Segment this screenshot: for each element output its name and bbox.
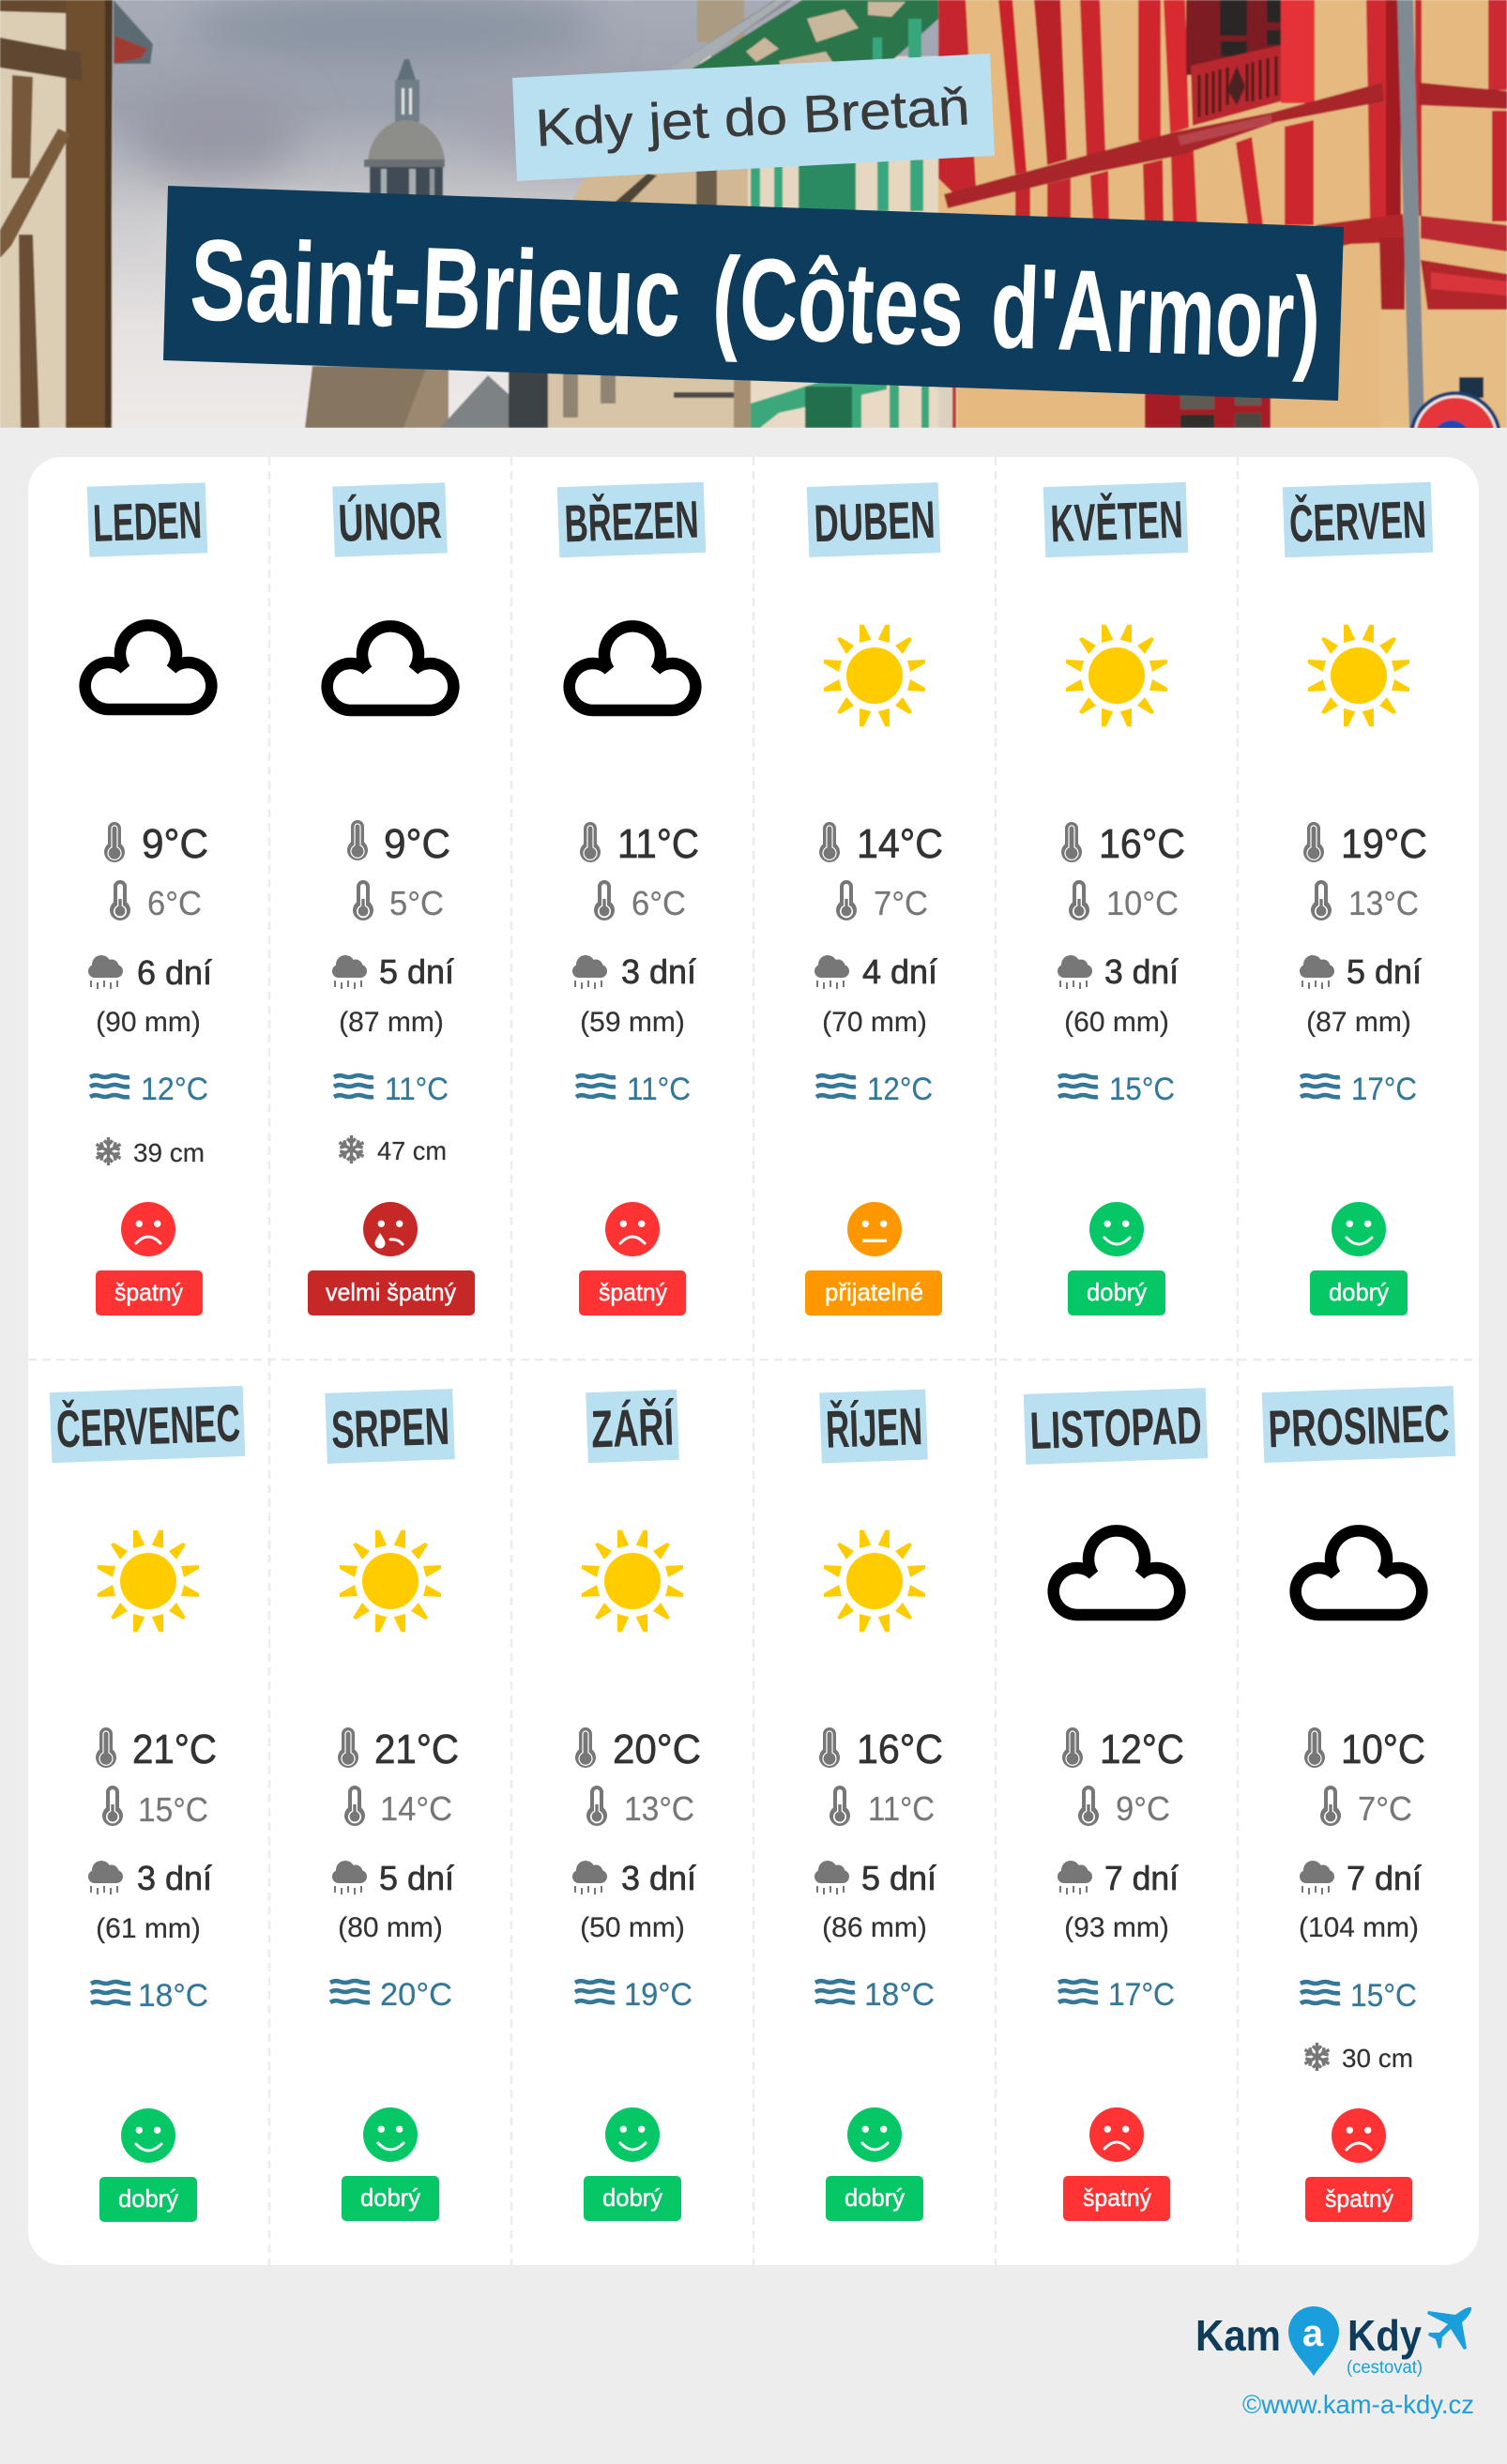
icon: min temperature (1311, 880, 1332, 920)
sea temperature: 15°C (1350, 1978, 1417, 2014)
icon: cloud (85, 625, 211, 709)
max temperature: 19°C (1341, 821, 1427, 867)
title tag: Kdy jet do Bretaň: Kdy jet do Bretaň (534, 76, 971, 158)
rainfall: (87 mm) (1306, 1007, 1411, 1038)
rating badge: dobrý (360, 2183, 420, 2212)
rating badge (1305, 2177, 1412, 2222)
max temperature: 20°C (613, 1726, 701, 1772)
icon: cloud (570, 626, 695, 710)
min temperature: 10°C (1106, 884, 1179, 922)
icon: rain (1058, 1861, 1092, 1894)
month panel: Březen (557, 482, 706, 1316)
month panel: Říjen (814, 1390, 943, 2221)
rating badge (96, 1270, 203, 1316)
rating badge: dobrý (1087, 1278, 1147, 1306)
icon: max temperature (347, 820, 368, 860)
month label: ŘÍJEN (825, 1396, 923, 1459)
icon: sea (330, 1981, 370, 2002)
icon: min temperature (830, 1786, 850, 1826)
min temperature: 9°C (1116, 1789, 1170, 1828)
rainy days: 3 dní (1104, 952, 1179, 991)
sea temperature: 11°C (627, 1072, 691, 1107)
icon: sea (90, 1075, 129, 1097)
rainfall: (50 mm) (580, 1912, 685, 1943)
rainfall: (86 mm) (822, 1912, 927, 1943)
logo: Kam a Kdy (cestovat) (1195, 2306, 1471, 2378)
icon: max temperature (575, 1727, 596, 1768)
rating badge: dobrý (1329, 1278, 1389, 1306)
sea temperature: 11°C (385, 1072, 449, 1107)
icon: rain (88, 955, 123, 989)
rating badge (342, 2176, 439, 2221)
icon: rain (332, 955, 367, 989)
sea temperature: 19°C (624, 1977, 693, 2013)
month label (807, 482, 940, 557)
rating badge: dobrý (602, 2183, 662, 2212)
title banner: Saint-Brieuc (Côtes d'Armor): (Côtes (710, 234, 967, 372)
icon: bad face (121, 1202, 175, 1256)
rainfall: (104 mm) (1299, 1912, 1419, 1943)
rating badge (584, 2176, 681, 2221)
icon: max temperature (1062, 1727, 1083, 1768)
month label (87, 482, 207, 557)
rainfall: (87 mm) (339, 1007, 444, 1038)
rainy days: 4 dní (862, 952, 937, 991)
icon: min temperature (836, 880, 857, 920)
sea temperature: 12°C (867, 1072, 933, 1107)
max temperature: 9°C (142, 821, 208, 867)
rainfall: (59 mm) (580, 1007, 685, 1038)
icon: min temperature (1069, 880, 1089, 920)
snowfall: 47 cm (377, 1136, 447, 1165)
icon: good face (121, 2108, 175, 2163)
max temperature: 9°C (384, 821, 450, 867)
header photo: half-timbered houses in Brittany (0, 0, 1507, 428)
logo: Kam a Kdy (cestovat): Kam (1195, 2311, 1281, 2360)
month label: LISTOPAD (1029, 1395, 1203, 1460)
max temperature: 16°C (1099, 821, 1185, 867)
max temperature: 10°C (1341, 1726, 1425, 1772)
max temperature: 12°C (1100, 1726, 1184, 1772)
rainy days: 6 dní (137, 953, 212, 992)
icon: good face (847, 2107, 902, 2162)
title banner: Saint-Brieuc (Côtes d'Armor): d'Armor) (989, 244, 1322, 384)
snowfall: 30 cm (1342, 2044, 1413, 2073)
month label: ČERVENEC (55, 1393, 241, 1458)
logo: Kam a Kdy (cestovat): a (1302, 2313, 1324, 2354)
icon: rain (572, 955, 607, 989)
icon: sea (334, 1075, 373, 1097)
month panel: Únor (308, 482, 475, 1316)
icon: plane (1427, 2307, 1471, 2350)
icon: sun (1066, 625, 1167, 726)
rainfall: (61 mm) (96, 1913, 201, 1944)
icon: min temperature (586, 1786, 607, 1826)
month label (50, 1386, 245, 1463)
rainy days: 3 dní (621, 952, 696, 991)
icon: rain (1300, 955, 1334, 989)
icon: max temperature (96, 1727, 116, 1768)
icon: cloud (1054, 1530, 1180, 1615)
rainfall: (93 mm) (1064, 1912, 1169, 1943)
rating badge (308, 1270, 475, 1316)
rating badge: velmi špatný (326, 1278, 456, 1306)
month label (1024, 1388, 1208, 1465)
min temperature: 6°C (632, 884, 686, 922)
month label: BŘEZEN (563, 490, 700, 553)
icon: sea (91, 1982, 130, 2003)
rainy days: 5 dní (379, 952, 454, 991)
panel: climate calendar card (28, 457, 1479, 2265)
month panel: Prosinec (1262, 1386, 1455, 2222)
icon: sea (816, 1075, 856, 1097)
icon: max temperature (819, 1727, 840, 1768)
month label: SRPEN (330, 1396, 450, 1459)
icon: cloud (327, 626, 453, 710)
icon: rain (1300, 1861, 1334, 1894)
month panel: Květen (1043, 482, 1188, 1316)
month panel: Listopad (1024, 1388, 1208, 2221)
icon: max temperature (104, 822, 125, 862)
rainy days: 7 dní (1104, 1859, 1179, 1897)
month panel: Září (572, 1390, 701, 2221)
icon: snow (337, 1135, 366, 1164)
month label: ÚNOR (337, 490, 443, 553)
icon: min temperature (594, 880, 615, 920)
month label: LEDEN (92, 490, 203, 553)
rainfall: (60 mm) (1064, 1007, 1169, 1038)
sea temperature: 17°C (1108, 1977, 1175, 2013)
rainfall: (80 mm) (338, 1912, 443, 1943)
logo: Kam a Kdy (cestovat): (cestovat) (1347, 2358, 1423, 2378)
icon: max temperature (580, 822, 601, 862)
month panel: Leden (85, 482, 212, 1316)
rating badge (805, 1270, 942, 1316)
icon: bad face (1089, 2107, 1144, 2162)
icon: rain (572, 1861, 607, 1894)
icon: sea (575, 1981, 615, 2002)
rating badge (826, 2176, 923, 2221)
month label (586, 1390, 679, 1463)
icon: sea (1301, 1982, 1340, 2003)
min temperature: 15°C (138, 1790, 208, 1829)
icon: sea (1301, 1075, 1340, 1097)
sea temperature: 20°C (380, 1977, 452, 2013)
icon: sun (340, 1530, 441, 1632)
icon: sun (1308, 625, 1409, 726)
rainfall: (70 mm) (822, 1007, 927, 1038)
max temperature: 16°C (857, 1726, 943, 1772)
month label: KVĚTEN (1049, 490, 1184, 553)
icon: max temperature (1303, 822, 1324, 862)
rainy days: 5 dní (379, 1859, 454, 1897)
icon: rain (1058, 955, 1092, 989)
icon: sun (824, 625, 925, 726)
min temperature: 7°C (874, 884, 928, 922)
rating badge: špatný (114, 1278, 183, 1306)
month panel: Červenec (50, 1386, 245, 2222)
rainy days: 5 dní (1347, 952, 1422, 991)
rating badge: špatný (1325, 2184, 1393, 2213)
icon: rain (88, 1861, 123, 1894)
month label: ZÁŘÍ (590, 1396, 676, 1459)
icon: sun (98, 1530, 199, 1632)
sea temperature: 15°C (1109, 1072, 1175, 1107)
rating badge: špatný (599, 1278, 667, 1306)
icon: min temperature (110, 880, 130, 920)
rating badge: dobrý (845, 2183, 905, 2212)
title banner: Saint-Brieuc (Côtes d'Armor) (163, 186, 1344, 401)
rainfall: (90 mm) (96, 1007, 201, 1038)
rating badge (1310, 1270, 1408, 1316)
icon: sea (1058, 1075, 1098, 1097)
icon: min temperature (353, 880, 373, 920)
month label: ČERVEN (1288, 489, 1427, 554)
icon: good face (363, 2107, 418, 2162)
icon: good face (1332, 1202, 1386, 1256)
icon: rain (332, 1861, 367, 1894)
month label (332, 482, 448, 557)
title tag: Kdy jet do Bretaň (512, 53, 995, 181)
min temperature: 6°C (147, 884, 202, 922)
website credit: ©www.kam-a-kdy.cz (1242, 2390, 1474, 2419)
icon: snow (1302, 2043, 1332, 2071)
icon: good face (605, 2107, 660, 2162)
min temperature: 5°C (389, 884, 444, 922)
min temperature: 14°C (380, 1789, 452, 1828)
logo: Kam a Kdy (cestovat): Kdy (1347, 2311, 1422, 2360)
rating badge (579, 1270, 686, 1316)
icon: bad face (1332, 2108, 1386, 2163)
icon: snow (94, 1137, 123, 1165)
month label (557, 482, 706, 557)
month panel: Duben (805, 482, 943, 1316)
month panel: Červen (1283, 482, 1433, 1316)
snowfall: 39 cm (133, 1138, 205, 1167)
rating badge: přijatelné (825, 1278, 923, 1306)
min temperature: 13°C (624, 1789, 694, 1828)
icon: neutral face (847, 1202, 902, 1256)
icon: very bad face (363, 1202, 418, 1256)
icon: min temperature (1078, 1786, 1099, 1826)
icon: cloud (1296, 1530, 1422, 1615)
rainy days: 7 dní (1347, 1859, 1422, 1897)
title banner: Saint-Brieuc (Côtes d'Armor): Saint-Brieuc (188, 216, 683, 361)
rating badge (99, 2177, 197, 2222)
icon: rain (814, 1861, 849, 1894)
min temperature: 11°C (868, 1789, 935, 1828)
icon: max temperature (1304, 1727, 1325, 1768)
icon: good face (1089, 1202, 1144, 1256)
max temperature: 11°C (617, 821, 699, 867)
icon: sea (815, 1981, 855, 2002)
month label (1283, 482, 1433, 557)
icon: bad face (605, 1202, 660, 1256)
icon: min temperature (344, 1786, 365, 1826)
month panel: Srpen (325, 1389, 459, 2221)
icon: sea (1058, 1981, 1098, 2002)
max temperature: 14°C (857, 821, 943, 867)
month label: DUBEN (813, 490, 936, 553)
min temperature: 7°C (1358, 1789, 1412, 1828)
rainy days: 3 dní (621, 1859, 696, 1897)
max temperature: 21°C (374, 1726, 459, 1772)
icon: max temperature (338, 1727, 358, 1768)
icon: max temperature (819, 822, 840, 862)
rainy days: 5 dní (861, 1859, 936, 1897)
sea temperature: 18°C (864, 1977, 935, 2013)
icon: max temperature (1061, 822, 1082, 862)
icon: min temperature (102, 1786, 123, 1826)
rating badge: špatný (1083, 2183, 1151, 2212)
rating badge (1063, 2176, 1170, 2221)
icon: rain (814, 955, 849, 989)
max temperature: 21°C (132, 1726, 217, 1772)
rating badge (1068, 1270, 1165, 1316)
min temperature: 13°C (1348, 884, 1419, 922)
icon: sun (824, 1530, 925, 1632)
month label (819, 1390, 928, 1463)
month label (1043, 482, 1188, 557)
icon: sea (576, 1075, 616, 1097)
icon: min temperature (1320, 1786, 1341, 1826)
month label (325, 1389, 455, 1464)
sea temperature: 12°C (141, 1072, 208, 1107)
rating badge: dobrý (118, 2184, 178, 2213)
sea temperature: 17°C (1351, 1072, 1417, 1107)
icon: map pin (1288, 2306, 1339, 2376)
icon: sun (582, 1530, 683, 1632)
rainy days: 3 dní (137, 1859, 212, 1897)
sea temperature: 18°C (138, 1978, 208, 2014)
